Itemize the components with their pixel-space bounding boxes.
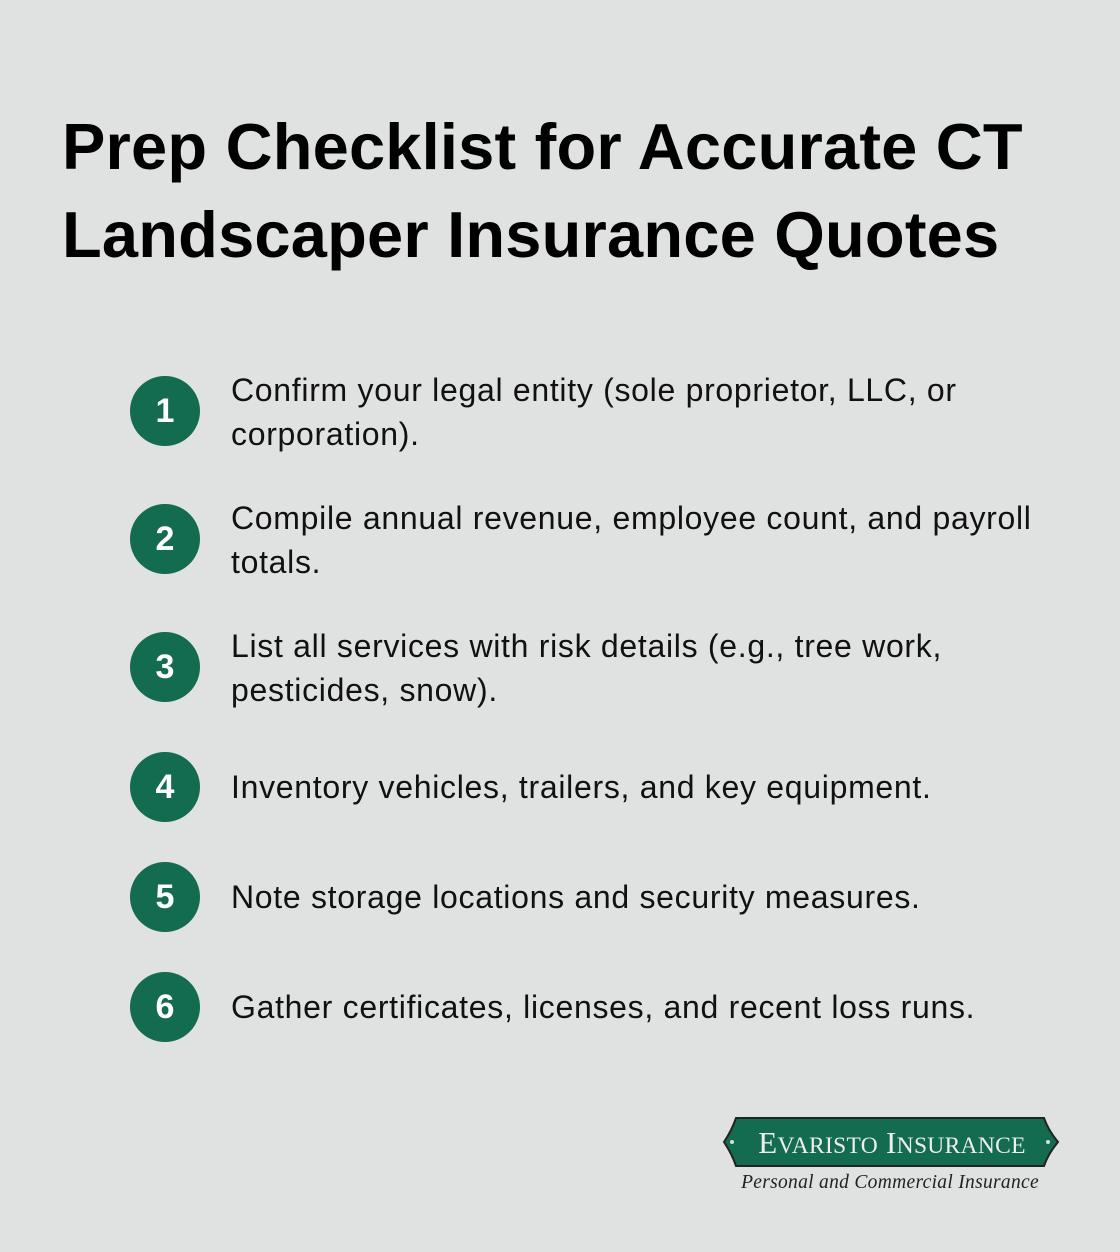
item 3: pesticides, snow). bbox=[231, 672, 498, 708]
item 1: 1 bbox=[156, 392, 174, 430]
item 6: Gather certificates, licenses, and recent loss runs. bbox=[231, 989, 975, 1025]
item 6 bbox=[130, 972, 975, 1042]
logo: Personal and Commercial Insurance bbox=[740, 1172, 1039, 1193]
item 3 bbox=[130, 628, 942, 708]
item 5: Note storage locations and security measures. bbox=[231, 879, 921, 915]
item 4 bbox=[130, 752, 932, 822]
item 2: Compile annual revenue, employee count, and payroll bbox=[231, 500, 1032, 536]
item 2: totals. bbox=[231, 544, 321, 580]
title: Prep Checklist for Accurate CT bbox=[62, 110, 1023, 183]
item 1 bbox=[130, 372, 957, 452]
item 4: Inventory vehicles, trailers, and key equipment. bbox=[231, 769, 932, 805]
item 3: List all services with risk details (e.g., tree work, bbox=[231, 628, 942, 664]
title: Landscaper Insurance Quotes bbox=[62, 198, 999, 271]
item 2 bbox=[130, 500, 1032, 580]
item 1: corporation). bbox=[231, 416, 420, 452]
item 2: 2 bbox=[156, 520, 174, 558]
title bbox=[62, 110, 1023, 271]
item 1: Confirm your legal entity (sole proprietor, LLC, or bbox=[231, 372, 957, 408]
item 5: 5 bbox=[156, 878, 174, 916]
item 3: 3 bbox=[156, 648, 174, 686]
item 4: 4 bbox=[156, 768, 174, 806]
logo: EVARISTO INSURANCE bbox=[758, 1125, 1026, 1160]
item 6: 6 bbox=[156, 988, 174, 1026]
logo bbox=[722, 1117, 1060, 1193]
item 5 bbox=[130, 862, 921, 932]
